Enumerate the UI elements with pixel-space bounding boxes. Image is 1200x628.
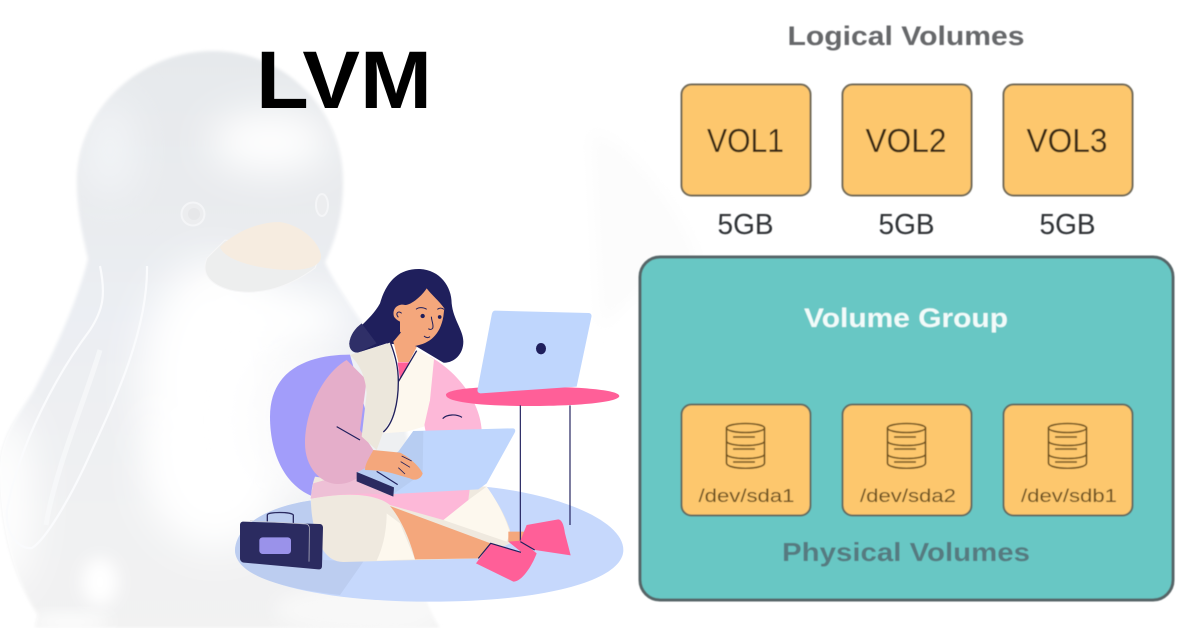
physical volume 2: /dev/sda2	[860, 486, 956, 506]
heading: volume group: Volume Group	[804, 303, 1008, 333]
size label 2: 5GB	[878, 209, 934, 241]
keyboard edge	[357, 472, 394, 497]
penguin left eye	[182, 202, 204, 226]
panel: volume group	[640, 257, 1173, 600]
size label 1: 5GB	[718, 209, 774, 241]
physical volume 2	[842, 404, 972, 516]
laptop logo	[536, 343, 546, 354]
sleeve creases	[337, 415, 462, 440]
glass penguin mascot	[0, 51, 450, 628]
faint background wedge	[590, 130, 700, 330]
far sock	[520, 519, 571, 555]
penguin lower beak	[205, 240, 320, 292]
table top	[446, 387, 619, 406]
heading: logical volumes: Logical Volumes	[788, 21, 1024, 51]
handbag	[240, 512, 323, 569]
table legs	[520, 405, 570, 543]
rug	[235, 487, 623, 602]
logical volume 2	[842, 84, 972, 196]
logical volume 3	[1004, 84, 1132, 196]
physical volume 1: /dev/sda1	[698, 486, 794, 506]
face	[394, 288, 444, 346]
bare leg	[390, 506, 491, 559]
logical volume 3: VOL3	[1026, 122, 1108, 159]
right sleeve	[423, 357, 482, 437]
physical volume 3	[1004, 404, 1132, 516]
robe collar line	[383, 343, 417, 432]
penguin upper beak	[220, 222, 321, 270]
logical volume 2: VOL2	[866, 122, 946, 159]
logical volume 1: VOL1	[707, 122, 784, 159]
chair cushion	[270, 355, 370, 497]
physical volume 1	[682, 404, 810, 516]
title: LVM	[256, 35, 432, 126]
heading: physical volumes: Physical Volumes	[782, 537, 1030, 567]
dress skirt	[311, 477, 510, 562]
dress pink band	[311, 467, 470, 520]
logical volume 1	[682, 84, 810, 196]
neck	[393, 332, 417, 362]
top under robe	[398, 362, 410, 380]
LVM diagram	[640, 21, 1173, 600]
faded hair tip	[349, 323, 377, 353]
hair	[349, 269, 463, 363]
size label 3: 5GB	[1040, 209, 1096, 241]
physical volume 3: /dev/sdb1	[1021, 486, 1117, 506]
woman with laptop illustration	[235, 269, 623, 602]
robe right panel	[383, 349, 434, 433]
facial details	[397, 308, 444, 338]
robe left panel	[350, 343, 398, 450]
penguin flipper	[7, 266, 147, 548]
skirt light panel	[377, 487, 510, 561]
penguin right eye	[316, 194, 328, 216]
left sleeve	[305, 360, 373, 484]
back laptop	[477, 311, 592, 393]
hand	[365, 450, 423, 480]
rug shade under penguin	[235, 501, 363, 595]
front laptop	[357, 428, 515, 494]
near sock	[476, 541, 537, 582]
